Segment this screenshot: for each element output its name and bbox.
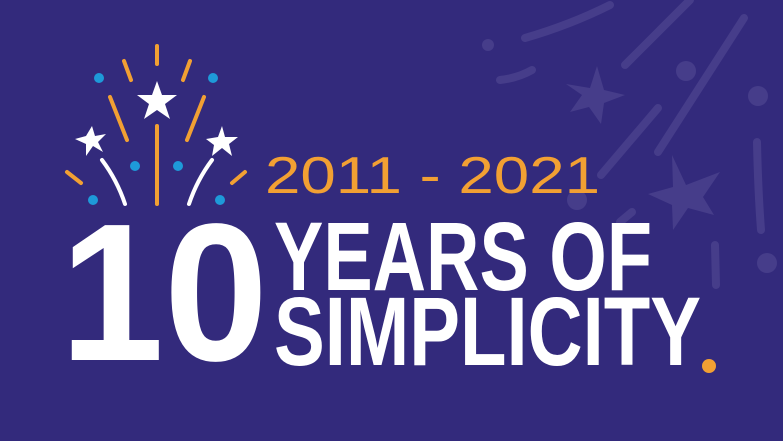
icon: fireworks	[67, 46, 245, 205]
orange period	[702, 359, 716, 373]
decorative confetti background	[482, 0, 777, 285]
years heading: 2011 - 2021	[265, 147, 600, 205]
big number 10: 10	[60, 183, 268, 402]
title line 1: YEARS OF	[274, 202, 652, 311]
